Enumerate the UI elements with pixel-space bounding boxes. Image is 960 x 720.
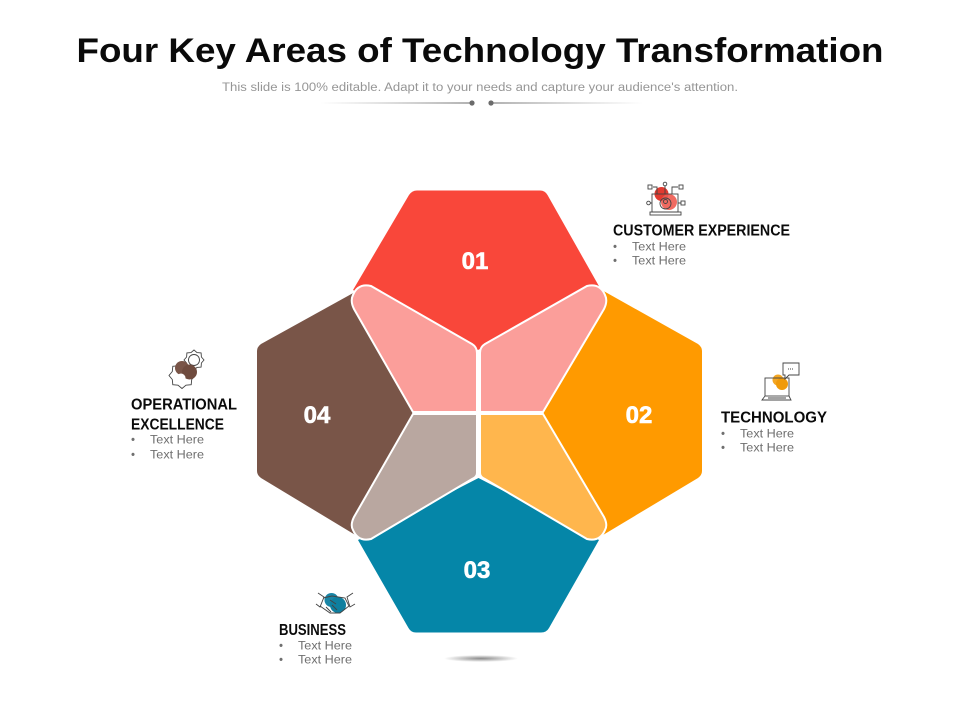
label: operational excellence: OPERATIONAL	[131, 396, 237, 414]
label: technology: •	[721, 428, 725, 440]
label: technology: Text Here	[740, 442, 794, 454]
icon: business handshake	[316, 593, 355, 613]
segment 03 teal	[358, 478, 599, 632]
petal light orange	[480, 414, 606, 540]
label: operational excellence	[131, 396, 237, 462]
icon: operational excellence gears	[169, 350, 204, 388]
number 03: 03	[464, 557, 490, 584]
label: operational excellence: Text Here	[150, 450, 204, 462]
petal taupe	[352, 414, 477, 540]
label: customer experience: Text Here	[632, 242, 686, 254]
title: Four Key Areas of Technology Transformation	[76, 32, 884, 70]
label: technology: •	[721, 442, 725, 454]
petal pink right	[480, 285, 606, 412]
label: technology: TECHNOLOGY	[721, 410, 827, 426]
label: business: BUSINESS	[279, 622, 346, 639]
label: customer experience: •	[613, 256, 617, 268]
label: business: Text Here	[298, 654, 352, 666]
label: customer experience: CUSTOMER EXPERIENCE	[613, 222, 790, 240]
label: business	[279, 622, 352, 666]
hexagon diagram	[257, 190, 702, 632]
number 01: 01	[462, 248, 488, 275]
label: operational excellence: •	[131, 450, 135, 462]
label: technology: Text Here	[740, 428, 794, 440]
label: operational excellence: Text Here	[150, 434, 204, 446]
label: operational excellence: •	[131, 434, 135, 446]
icon: technology	[762, 363, 799, 400]
label: business: •	[279, 654, 283, 666]
number 04: 04	[304, 402, 331, 429]
label: customer experience: Text Here	[632, 256, 686, 268]
label: customer experience: •	[613, 242, 617, 254]
icon: customer experience	[647, 182, 685, 215]
label: customer experience	[613, 222, 790, 268]
segment 01 red	[353, 190, 600, 350]
segment 02 orange	[540, 289, 702, 538]
label: business: •	[279, 640, 283, 652]
label: technology	[721, 410, 827, 454]
subtitle: This slide is 100% editable. Adapt it to your needs and capture your audience's attention.	[222, 82, 738, 94]
label: operational excellence: EXCELLENCE	[131, 416, 224, 434]
number 02: 02	[626, 402, 652, 429]
segment 04 brown	[257, 292, 416, 536]
petal pink left	[352, 285, 477, 412]
title divider	[320, 100, 643, 106]
base shadow	[444, 655, 518, 662]
label: business: Text Here	[298, 640, 352, 652]
